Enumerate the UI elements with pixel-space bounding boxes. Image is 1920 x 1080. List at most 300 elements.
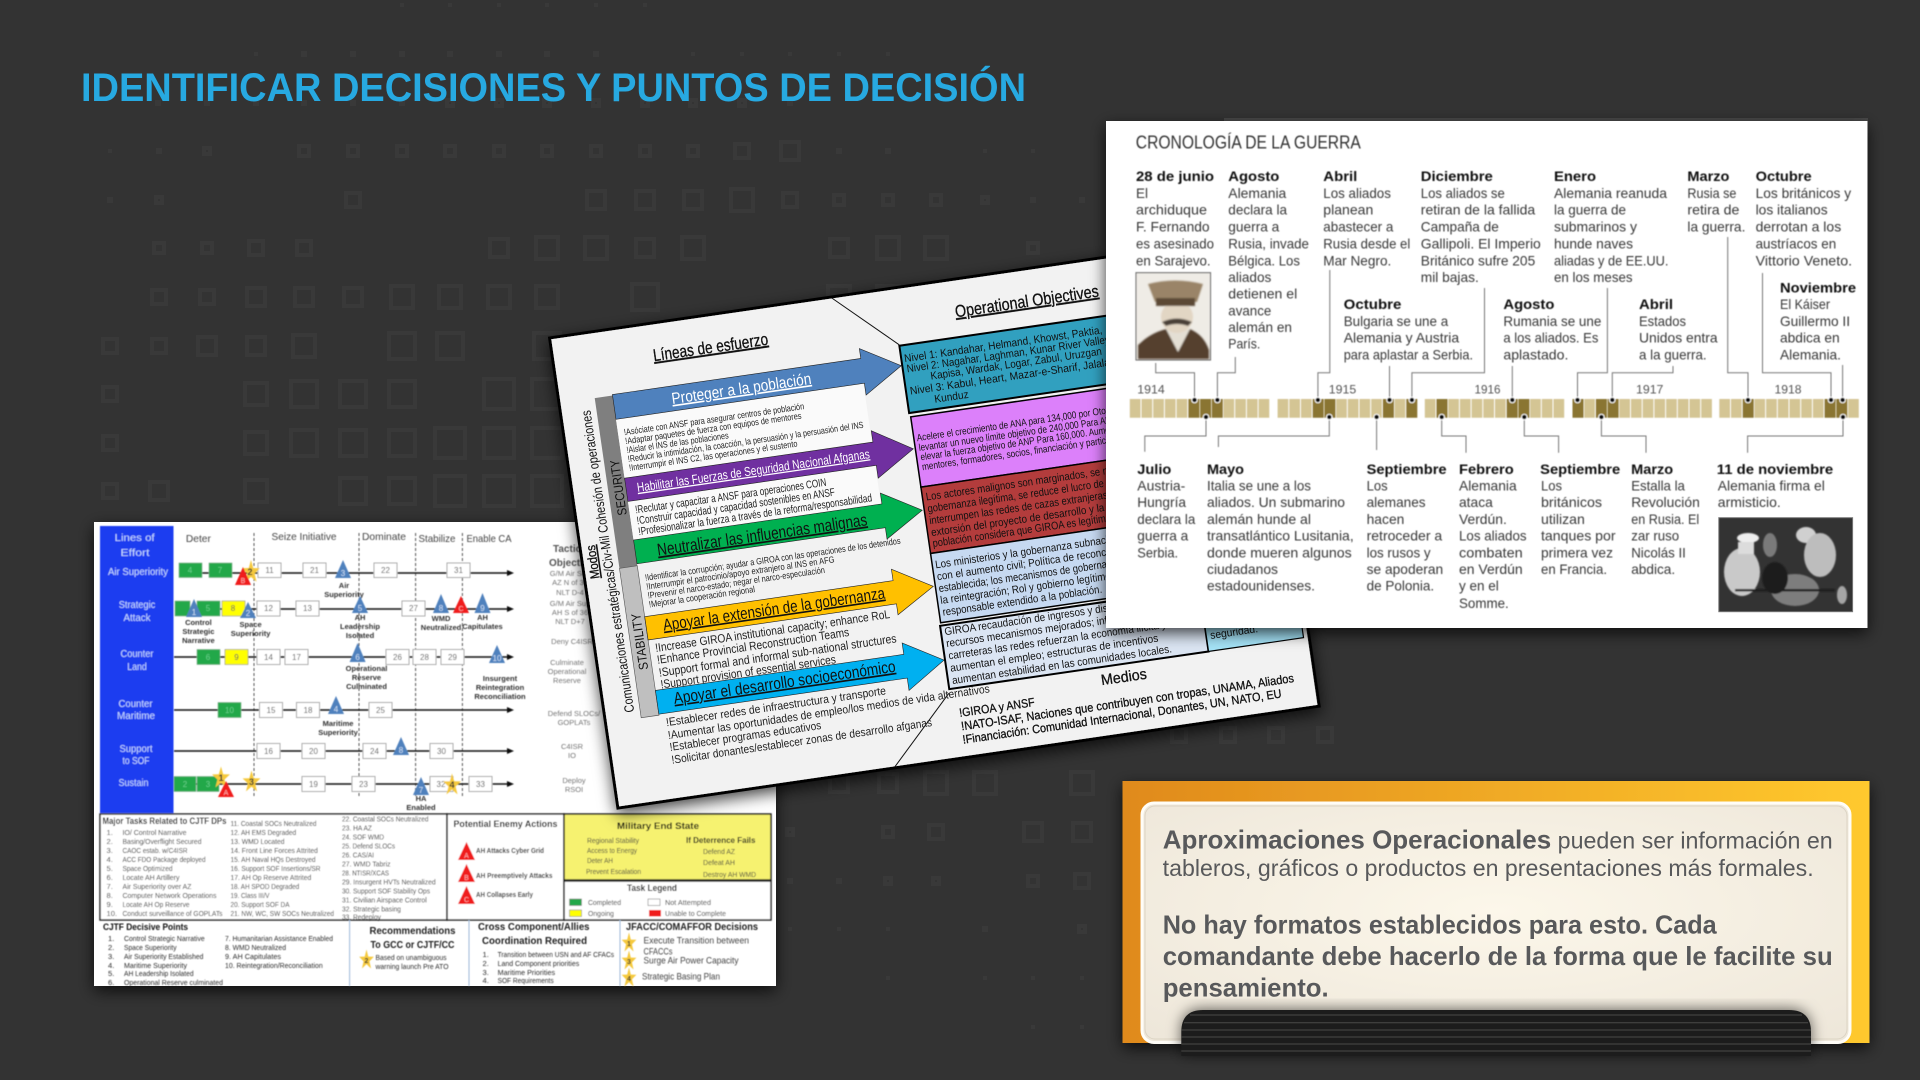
timeline: counter land: 10 bbox=[493, 654, 502, 663]
objective box: pale blue with security cell: carreteras las redes refuerzan la economía ilícita y bbox=[948, 619, 1168, 662]
panel: war chronology timeline: los italianos bbox=[1756, 202, 1828, 218]
block: CJTF decisive points: Maritime Superiority bbox=[124, 961, 187, 970]
phase headers: Deter bbox=[186, 533, 211, 545]
top events: 28 de junio bbox=[1136, 168, 1214, 184]
timeline: counter land: Reserve bbox=[352, 673, 381, 682]
block: recommendations: 2 bbox=[365, 958, 369, 965]
objective box: red: gobernanza ilegítima, se reduce el lucro de bbox=[927, 478, 1105, 515]
timeline: counter land bbox=[174, 643, 526, 701]
timeline: sustain: 19 bbox=[309, 780, 318, 789]
panel: war chronology timeline: Marzo bbox=[1631, 461, 1673, 477]
objective box: pink bbox=[911, 366, 1274, 487]
list: desarrollo bbox=[665, 671, 994, 767]
box: major tasks: 21. NW, WC, SW SOCs Neutralized bbox=[230, 909, 334, 918]
timeline: counter land: 6 bbox=[355, 653, 360, 662]
timeline: counter maritime: 15 bbox=[267, 706, 276, 715]
block: CJTF decisive points: 9. AH Capitulates bbox=[225, 952, 281, 961]
timeline: air superiority: 3 bbox=[341, 569, 346, 578]
panel: war chronology timeline: Los bbox=[1367, 477, 1388, 493]
panel: war chronology timeline: Agosto bbox=[1228, 168, 1279, 184]
panel: war chronology timeline: en Verdún bbox=[1459, 561, 1523, 577]
panel: war chronology timeline: Los bbox=[1541, 477, 1562, 493]
box: major tasks: 32. Strategic basing bbox=[342, 904, 401, 914]
timeline: air superiority: Superiority bbox=[324, 590, 365, 599]
box: major tasks: 25. Defend SLOCs bbox=[342, 842, 395, 850]
block: CJTF decisive points: 8. WMD Neutralized bbox=[225, 943, 286, 952]
list: neutralizar: !Identificar la corrupción; ayudar a GIROA con las operaciones de los detenidos bbox=[644, 536, 902, 583]
timeline: strategic attack: Control bbox=[185, 618, 212, 627]
armistice photo bbox=[1719, 518, 1853, 612]
timeline: air superiority: 7 bbox=[218, 566, 223, 575]
panel: war chronology timeline: a los aliados. Es bbox=[1503, 330, 1598, 346]
box: major tasks: 15. AH Naval HQs Destroyed bbox=[230, 855, 316, 864]
timeline bar: months bbox=[1130, 399, 1859, 418]
block: cross component coordination: 2. bbox=[482, 959, 489, 968]
arrow: proteger a la poblacion bbox=[611, 343, 905, 431]
block: CJTF decisive points bbox=[103, 920, 620, 987]
timeline: counter maritime: 25 bbox=[376, 706, 385, 715]
panel: war chronology timeline: Marzo bbox=[1687, 168, 1729, 184]
timeline: strategic attack: 1 bbox=[192, 608, 197, 617]
box: major tasks: Major Tasks Related to CJTF DPs bbox=[102, 816, 226, 826]
timeline: strategic attack: C bbox=[458, 606, 464, 613]
objective box: pink: levantar un nuevo límite objetivo de 240,000 Para ANP bbox=[918, 414, 1118, 454]
block: CJTF decisive points: Space Superiority bbox=[124, 943, 177, 952]
panel: war chronology timeline: Abril bbox=[1639, 296, 1673, 312]
box: major tasks: 24. SOF WMD bbox=[342, 832, 384, 842]
panel: war chronology timeline: abdica en bbox=[1780, 330, 1840, 346]
objective box: light blue: responsable extendido a la población. bbox=[942, 584, 1103, 619]
block: JFACC decisions: 1 bbox=[627, 941, 631, 948]
block: JFACC decisions: JFACC/COMAFFOR Decisions bbox=[626, 921, 758, 933]
timeline: sustain: 4 bbox=[449, 780, 455, 790]
timeline: support to SOF bbox=[174, 737, 514, 758]
tactical objectives column: G/M Air Sup bbox=[550, 569, 590, 578]
block: JFACC decisions: Execute Transition between bbox=[644, 936, 749, 946]
box: major tasks: 7. bbox=[106, 882, 113, 891]
lines of effort blue column: Lines of bbox=[115, 532, 155, 544]
panel: war chronology timeline: Octubre bbox=[1756, 168, 1812, 184]
block: cross component coordination: Transition between USN and AF CFACs bbox=[498, 950, 614, 959]
box: major tasks: 12. AH EMS Degraded bbox=[230, 828, 296, 837]
panel: war chronology timeline: en los meses bbox=[1554, 269, 1633, 285]
block: recommendations: Recommendations bbox=[370, 925, 456, 937]
timeline: sustain: 7 bbox=[419, 786, 424, 795]
arrow: apoyar el desarrollo: Apoyar el desarrollo socioeconómico bbox=[673, 658, 897, 708]
lines of effort blue column: Attack bbox=[124, 612, 151, 624]
box: major tasks: 31. Civilian Airspace Control bbox=[342, 896, 427, 904]
tactical objectives column: AH S of 36 bbox=[552, 608, 588, 617]
panel: war chronology timeline: Los aliados se bbox=[1421, 185, 1505, 201]
timeline: air superiority: 31 bbox=[454, 566, 463, 575]
box: potential enemy actions: AH Collapses Early bbox=[476, 892, 533, 899]
box: major tasks: 3. bbox=[106, 846, 113, 855]
panel: war chronology timeline: zar ruso bbox=[1631, 528, 1679, 544]
panel: war chronology timeline: británicos bbox=[1541, 494, 1602, 510]
panel: war chronology timeline: transatlántico Lusitania, bbox=[1207, 528, 1354, 544]
list: habilitar: !Construir capacidad y capacidad sostenibles en ANSF bbox=[636, 487, 836, 527]
panel: war chronology timeline: Gallipoli. El Imperio bbox=[1421, 236, 1541, 252]
timeline: sustain bbox=[174, 766, 514, 812]
timeline: counter land: 29 bbox=[448, 653, 457, 662]
box: major tasks: 23. HA AZ bbox=[342, 824, 372, 832]
list: proteger: !Reducir la intimidación, la coacción, la persuasión y la persuasión del INS bbox=[627, 420, 864, 464]
panel: war chronology timeline: planean bbox=[1323, 202, 1373, 218]
lines of effort blue column: Land bbox=[127, 661, 147, 673]
list: proteger bbox=[623, 393, 865, 473]
panel: war chronology timeline: primera vez bbox=[1541, 544, 1613, 560]
timeline: support to SOF: 16 bbox=[264, 747, 273, 756]
panel: war chronology timeline: Los aliados bbox=[1323, 185, 1391, 201]
timeline: strategic attack: Strategic bbox=[182, 627, 214, 636]
panel: war chronology timeline: a la guerra. bbox=[1639, 347, 1707, 363]
column: stability: STABILITY bbox=[628, 612, 651, 671]
box: military end state: Defend AZ bbox=[703, 849, 736, 856]
timeline: air superiority: 21 bbox=[310, 566, 319, 575]
objective box: light blue: Los ministerios y la gobernanza subnacional bbox=[934, 532, 1127, 571]
list: medios: !Financiación: Comunidad Internacional, Donantes, UN, NATO, EU bbox=[962, 687, 1282, 747]
lower leader lines bbox=[1145, 417, 1843, 453]
panel: war chronology timeline: Estalla la bbox=[1631, 477, 1685, 493]
side labels: modos and strategic communications: Modos bbox=[583, 544, 603, 580]
panel: war chronology timeline: en Francia. bbox=[1541, 561, 1607, 577]
objective box: red: extorsión del proyecto de desarrollo y la bbox=[930, 502, 1106, 539]
timeline: strategic attack: 2 bbox=[246, 609, 251, 618]
top events: F. Fernando bbox=[1136, 219, 1210, 235]
panel: war chronology timeline: aliadas y de EE.UU. bbox=[1554, 252, 1668, 268]
objective box: pale blue with security cell: aumentan el empleo; estructuras de incentivos bbox=[949, 633, 1159, 675]
box: major tasks: Locate AH Op Reserve bbox=[122, 900, 190, 909]
timeline: sustain: HA bbox=[416, 794, 427, 803]
tactical objectives column: Operational bbox=[548, 667, 587, 676]
list background: proteger bbox=[616, 383, 872, 479]
timeline: counter land: 28 bbox=[420, 653, 429, 662]
box: major tasks: 17. AH Op Reserve Attrited bbox=[230, 873, 311, 882]
panel: war chronology timeline: Guillermo II bbox=[1780, 313, 1850, 329]
panel: war chronology timeline: Vittorio Veneto. bbox=[1756, 252, 1852, 268]
panel: war chronology timeline: aplastado. bbox=[1503, 347, 1568, 363]
list: gobernanza bbox=[654, 607, 899, 692]
block: cross component coordination: Coordination Required bbox=[482, 935, 587, 947]
timeline: strategic attack: Neutralized bbox=[421, 623, 462, 632]
timeline: strategic attack: Narrative bbox=[182, 636, 215, 645]
timeline: strategic attack: Capitulates bbox=[462, 622, 503, 631]
timeline: strategic attack: 5 bbox=[358, 604, 363, 613]
bottom events bbox=[1137, 461, 1196, 560]
block: CJTF decisive points: 7. Humanitarian Assistance Enabled bbox=[225, 934, 333, 943]
panel: war chronology timeline: Diciembre bbox=[1421, 168, 1493, 184]
list: habilitar: !Profesionalizar la fuerza a través de la reforma/responsabilidad bbox=[638, 492, 873, 538]
block: JFACC decisions: 3 bbox=[627, 959, 631, 966]
objective box: light blue: la reintegración; Rol y gobierno legítimo bbox=[940, 570, 1112, 607]
box: major tasks: 14. Front Line Forces Attrited bbox=[230, 846, 318, 855]
timeline: strategic attack: AH bbox=[355, 613, 365, 622]
tactical objectives column: Defend SLOCs/ bbox=[548, 709, 601, 718]
upper leader lines bbox=[1156, 237, 1843, 400]
panel: war chronology timeline: declara la bbox=[1228, 202, 1287, 218]
list: habilitar: !Reclutar y capacitar a ANSF para operaciones COIN bbox=[634, 477, 827, 516]
box: major tasks: 16. Support SOF Insertions/SR bbox=[230, 864, 321, 873]
box: major tasks: Computer Network Operations bbox=[122, 891, 217, 900]
list: medios bbox=[958, 658, 1297, 747]
block: CJTF decisive points: 10. Reintegration/Reconciliation bbox=[225, 961, 323, 970]
panel: war chronology timeline: aliados. Un submarino bbox=[1207, 494, 1345, 510]
objective box: light blue bbox=[931, 502, 1294, 623]
panel: war chronology timeline: Italia se une a los bbox=[1207, 477, 1311, 493]
box: military end state: If Deterrence Fails bbox=[686, 836, 756, 845]
bottom events: Julio bbox=[1137, 461, 1171, 477]
year labels bbox=[1137, 382, 1802, 396]
year labels: 1916 bbox=[1474, 382, 1501, 396]
block: CJTF decisive points: 1. bbox=[108, 934, 114, 943]
timeline: counter maritime: Superiority bbox=[318, 728, 359, 737]
list: gobernanza: !Increase GIROA institutional capacity; enhance RoL bbox=[654, 607, 891, 655]
objective box: teal: Nivel 1: Kandahar, Helmand, Khowst, Paktia, bbox=[903, 324, 1103, 365]
list: desarrollo: !Solicitar donantes/establecer zonas de desarrollo afganas bbox=[671, 717, 933, 767]
panel: war chronology timeline: ataca bbox=[1459, 494, 1493, 510]
panel: war chronology timeline: Bélgica. Los bbox=[1228, 252, 1300, 268]
block: cross component coordination: Land Component priorities bbox=[498, 959, 579, 968]
dark tab bbox=[1181, 1010, 1811, 1056]
box: major tasks bbox=[100, 814, 447, 922]
panel: war chronology timeline: Agosto bbox=[1503, 296, 1554, 312]
panel: war chronology timeline: Rusia se bbox=[1687, 185, 1737, 201]
year labels: 1917 bbox=[1636, 382, 1664, 396]
arrow: habilitar las fuerzas bbox=[623, 425, 917, 514]
block: JFACC decisions: CFACCs bbox=[644, 946, 673, 956]
timeline: air superiority: 2 bbox=[247, 567, 253, 577]
tactical objectives column: NLT D+7 bbox=[555, 617, 585, 626]
callout text: tableros, gráficos o productos en presentaciones más formales. bbox=[1163, 855, 1814, 881]
top events: El bbox=[1136, 185, 1148, 201]
timeline: sustain: 33 bbox=[476, 780, 485, 789]
box: major tasks: 10. bbox=[106, 909, 117, 918]
box: major tasks: 30. Support SOF Stability Ops bbox=[342, 886, 430, 896]
timeline: air superiority: B bbox=[241, 578, 246, 585]
list: neutralizar: !Prevenir el narco-estado; negar el narco-especulación bbox=[647, 565, 826, 601]
panel: war chronology timeline: Los británicos y bbox=[1756, 185, 1851, 201]
box: military end state: Regional Stability bbox=[587, 838, 639, 845]
tactical objectives column bbox=[548, 544, 601, 794]
panel: war chronology timeline: París. bbox=[1228, 336, 1260, 352]
box: major tasks: 28. NTISR/XCAS bbox=[342, 868, 389, 878]
box: major tasks: Basing/Overflight Secured bbox=[122, 837, 202, 846]
list: proteger: !Aislar el INS de las poblaciones bbox=[626, 430, 730, 455]
block: JFACC decisions: Strategic Basing Plan bbox=[642, 972, 720, 982]
box: major tasks: 11. Coastal SOCs Neutralized bbox=[230, 819, 316, 828]
list: proteger: !Adaptar paquetes de fuerza con equipos de mentores bbox=[625, 411, 802, 446]
bottom events: Serbia. bbox=[1137, 544, 1178, 560]
panel: war chronology timeline: y en el bbox=[1459, 578, 1499, 594]
box: military end state: Defeat AH bbox=[703, 860, 735, 867]
block: recommendations: To GCC or CJTF/CC bbox=[370, 939, 455, 951]
box: potential enemy actions: Potential Enemy Actions bbox=[454, 819, 558, 829]
tactical objectives column: AZ N of 36 bbox=[552, 578, 588, 587]
block: CJTF decisive points: Operational Reserve culminated bbox=[124, 978, 223, 987]
arrow: neutralizar: Neutralizar las influencias malignas bbox=[656, 510, 868, 560]
heading: medios: Medios bbox=[1100, 666, 1148, 689]
box: military end state: Destroy AH WMD bbox=[703, 872, 756, 879]
box: military end state: Access to Energy bbox=[587, 848, 637, 855]
block: CJTF decisive points: AH Leadership Isolated bbox=[124, 969, 194, 978]
block: cross component coordination: SOF Requirements bbox=[498, 976, 554, 985]
panel: war chronology timeline: Alemania firma el bbox=[1718, 477, 1825, 493]
panel: war chronology timeline: en Rusia. El bbox=[1631, 511, 1699, 527]
panel: war chronology timeline: hacen bbox=[1367, 511, 1404, 527]
box: potential enemy actions: C bbox=[464, 897, 469, 904]
objective box: pale blue with security cell: GIROA recaudación de ingresos y distribución de bbox=[944, 595, 1159, 638]
panel: war chronology timeline: Septiembre bbox=[1540, 461, 1620, 477]
timeline: air superiority: Air bbox=[339, 581, 349, 590]
lines of effort blue column: Air Superiority bbox=[108, 566, 169, 578]
objective box: teal bbox=[899, 294, 1263, 413]
list background: habilitar bbox=[628, 465, 881, 540]
panel: war chronology timeline: utilizan bbox=[1541, 511, 1585, 527]
block: CJTF decisive points: 5. bbox=[108, 969, 114, 978]
tactical objectives column: IO bbox=[568, 751, 576, 760]
callout text: No hay formatos establecidos para esto. Cada bbox=[1163, 909, 1717, 939]
tactical objectives column: RSOI bbox=[565, 785, 583, 794]
panel: war chronology timeline: Abril bbox=[1323, 168, 1357, 184]
panel: war chronology timeline: Alemania. bbox=[1780, 347, 1841, 363]
timeline: strategic attack: AH bbox=[477, 613, 488, 622]
timeline: support to SOF: 24 bbox=[370, 747, 379, 756]
panel: war chronology timeline: Revolución bbox=[1631, 494, 1700, 510]
box: major tasks: 22. Coastal SOCs Neutralized bbox=[342, 814, 428, 824]
box: major tasks: 18. AH SPOD Degraded bbox=[230, 882, 299, 891]
box: major tasks: 19. Class III/V bbox=[230, 891, 270, 900]
block: cross component coordination: 4. bbox=[482, 976, 489, 985]
chronology title: CRONOLOGÍA DE LA GUERRA bbox=[1136, 132, 1361, 152]
box: major tasks: 9. bbox=[106, 900, 113, 909]
list: desarrollo: !Establecer programas educativos bbox=[669, 720, 822, 754]
list: neutralizar: !Interrumpir el patrocinio/apoyo extranjero al INS en AFG bbox=[646, 554, 835, 592]
timeline: sustain: 2 bbox=[183, 780, 188, 789]
timeline: counter land: 17 bbox=[292, 653, 301, 662]
year labels: 1918 bbox=[1774, 382, 1802, 396]
bottom events: Hungría bbox=[1137, 494, 1186, 510]
panel: war chronology timeline: Septiembre bbox=[1367, 461, 1447, 477]
panel: war chronology timeline: la guerra de bbox=[1554, 202, 1626, 218]
timeline: counter land: Operational bbox=[346, 664, 387, 673]
timeline: strategic attack: 27 bbox=[409, 604, 418, 613]
list: neutralizar: !Mejorar la cooperación regional bbox=[648, 584, 756, 609]
panel: war chronology timeline: Octubre bbox=[1344, 296, 1402, 312]
arrow: apoyar la extension bbox=[643, 564, 937, 651]
timeline: counter maritime: 4 bbox=[334, 705, 339, 714]
panel: war chronology timeline: se apoderan bbox=[1367, 561, 1443, 577]
lines of effort blue column: Maritime bbox=[117, 710, 155, 722]
title: IDENTIFICAR DECISIONES Y PUNTOS DE DECISIÓN bbox=[81, 64, 1026, 110]
panel: war chronology timeline: hunde naves bbox=[1554, 236, 1633, 252]
box: major tasks: 13. WMD Located bbox=[230, 837, 284, 846]
objective box: light blue: establecida; los mecanismos de gobernanza bbox=[938, 556, 1123, 595]
timeline: counter land: 9 bbox=[234, 653, 239, 662]
objective box: pink: mentores, formadores, socios, financiación y participación bbox=[921, 432, 1133, 473]
timeline: support to SOF: 8 bbox=[399, 746, 404, 755]
callout text bbox=[1163, 824, 1833, 1003]
box: potential enemy actions: B bbox=[464, 875, 469, 882]
timeline: counter land: Culminated bbox=[346, 682, 387, 691]
list: medios: !GIROA y ANSF bbox=[958, 695, 1036, 720]
panel: war chronology timeline: Nicolás II bbox=[1631, 544, 1686, 560]
box: major tasks: 26. CAS/AI bbox=[342, 850, 374, 860]
list: desarrollo: !Aumentar las oportunidades de empleo/los medios de vida alternativos bbox=[667, 683, 991, 742]
tactical objectives column: G/M Air Sup bbox=[550, 599, 590, 608]
timeline: strategic attack: Superiority bbox=[231, 629, 271, 638]
box: major tasks: 1. bbox=[106, 828, 113, 837]
objective box: red: Los actores malignos son marginados, se neutraliza bbox=[925, 460, 1145, 503]
timeline dots bbox=[1192, 397, 1846, 420]
panel: war chronology timeline: ciudadanos bbox=[1207, 561, 1278, 577]
callout text: pueden ser información en bbox=[1558, 827, 1833, 853]
timeline: counter land: 14 bbox=[264, 653, 273, 662]
cream card bbox=[1142, 803, 1850, 1042]
panel: war chronology timeline: Británico sufre 205 bbox=[1421, 252, 1535, 268]
top events: en Sarajevo. bbox=[1136, 252, 1211, 268]
lines of effort blue column bbox=[100, 526, 174, 813]
box: potential enemy actions: AH Preemptively Attacks bbox=[476, 873, 553, 880]
panel: war chronology timeline: aliados bbox=[1228, 269, 1271, 285]
panel: war chronology timeline: Rusia, invade bbox=[1228, 236, 1309, 252]
timeline: strategic attack: Isolated bbox=[346, 631, 375, 640]
timeline: air superiority: 22 bbox=[381, 566, 390, 575]
timeline: strategic attack: 5 bbox=[206, 604, 211, 613]
phase headers: Stabilize bbox=[418, 533, 456, 545]
arrow: proteger a la poblacion: Proteger a la población bbox=[671, 371, 812, 408]
panel: war chronology timeline: guerra a bbox=[1228, 219, 1279, 235]
block: CJTF decisive points: Control Strategic Narrative bbox=[124, 934, 205, 943]
timeline: support to SOF: 30 bbox=[437, 747, 446, 756]
panel: war chronology timeline: detienen el bbox=[1228, 286, 1297, 302]
panel: war chronology timeline: Mar Negro. bbox=[1323, 252, 1391, 268]
tactical objectives column: Culminate bbox=[550, 658, 584, 667]
objective box: pale blue with security cell: recursos mecanismos mejorados; infraestructura bbox=[945, 607, 1162, 650]
panel: war chronology timeline: El Káiser bbox=[1780, 296, 1830, 312]
phase headers: Enable CA bbox=[466, 533, 512, 545]
panel: war chronology timeline: Unidos entra bbox=[1639, 330, 1718, 346]
timeline: air superiority: 4 bbox=[188, 566, 193, 575]
box: major tasks: 20. Support SOF DA bbox=[230, 900, 290, 909]
box: major tasks: CAOC estab. w/C4ISR bbox=[122, 846, 188, 855]
tactical objectives column: Deploy bbox=[562, 776, 586, 785]
block: cross component coordination bbox=[478, 921, 614, 985]
box: potential enemy actions bbox=[447, 814, 564, 920]
objective box: teal: Kunduz bbox=[934, 389, 969, 406]
panel: war chronology timeline: abastecer a bbox=[1323, 219, 1393, 235]
box: major tasks: 5. bbox=[106, 864, 113, 873]
phase headers: Dominate bbox=[362, 531, 406, 543]
tactical objectives column: GOPLATs bbox=[558, 718, 591, 727]
box: military end state: Military End State bbox=[617, 821, 699, 831]
box: military end state bbox=[564, 814, 771, 880]
callout: operational approaches bbox=[1122, 781, 1870, 1056]
top events: es asesinado bbox=[1136, 236, 1214, 252]
arrow: neutralizar bbox=[632, 487, 926, 575]
block: cross component coordination: Maritime Priorities bbox=[498, 968, 555, 977]
arrow: apoyar el desarrollo bbox=[654, 637, 948, 727]
box: major tasks: 29. Insurgent HVTs Neutralized bbox=[342, 878, 436, 886]
block: CJTF decisive points: Air Superiority Established bbox=[124, 952, 203, 961]
timeline: air superiority bbox=[179, 560, 514, 599]
box: major tasks: Air Superiority over AZ bbox=[122, 882, 192, 891]
box: potential enemy actions: A bbox=[464, 853, 469, 860]
box: major tasks: 4. bbox=[106, 855, 113, 864]
panel: war chronology timeline: Alemania bbox=[1228, 185, 1287, 201]
panel: war chronology timeline bbox=[1106, 118, 1868, 628]
objective box: pale blue with security cell: seguridad. bbox=[1209, 623, 1259, 642]
side labels: modos and strategic communications: Comunicaciones estratégicas/Civ-Mil Cohesión de operaciones bbox=[578, 409, 637, 713]
